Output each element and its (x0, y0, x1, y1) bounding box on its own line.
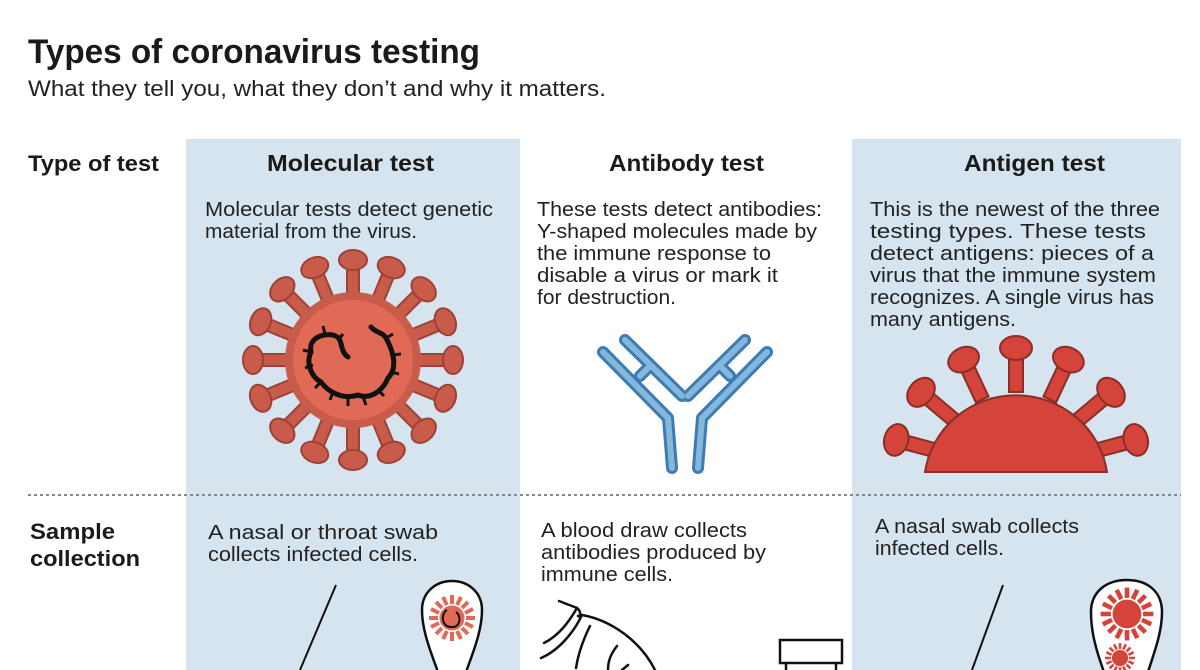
text: molecular description: material from the virus. (205, 221, 417, 243)
text: antibody sample (541, 520, 766, 586)
row label: type of test: Type of test (28, 151, 160, 176)
text: molecular sample: collects infected cells. (208, 544, 418, 566)
row label: sample collection: Sample (30, 519, 115, 544)
text: antigen sample (875, 516, 1079, 560)
panel: molecular column background (186, 139, 520, 670)
text: antigen description: recognizes. A single virus has (870, 287, 1154, 309)
text: antibody sample: antibodies produced by (541, 542, 766, 564)
text: antigen description: virus that the immune system (870, 265, 1156, 287)
text: molecular sample (208, 522, 438, 566)
title: Types of coronavirus testing (28, 33, 480, 71)
text: molecular description: Molecular tests detect genetic (205, 199, 493, 221)
icon: molecular swab (300, 581, 482, 670)
icon: blood draw arm and vial (541, 601, 842, 670)
text: molecular description (205, 199, 493, 243)
text: antibody sample: immune cells. (541, 564, 673, 586)
icon: antibody (Y-shaped) (603, 340, 767, 468)
text: antibody description: disable a virus or mark it (537, 265, 778, 287)
text: antigen sample: A nasal swab collects (875, 516, 1079, 538)
text: antibody description: These tests detect antibodies: (537, 199, 822, 221)
text: antibody description: for destruction. (537, 287, 676, 309)
heading: molecular test: Molecular test (267, 150, 434, 176)
text: antigen description (870, 199, 1160, 331)
text: antigen description: This is the newest of the three (870, 199, 1160, 221)
text: antibody sample: A blood draw collects (541, 520, 747, 542)
text: antibody description (537, 199, 822, 309)
heading: antibody test: Antibody test (609, 150, 764, 176)
dashed divider (28, 494, 1181, 496)
text: antigen description: many antigens. (870, 309, 1016, 331)
subtitle: What they tell you, what they don’t and why it matters. (28, 76, 606, 101)
row label: sample collection (30, 519, 140, 571)
text: antibody description: Y-shaped molecules made by (537, 221, 817, 243)
icon: coronavirus with genetic material (243, 250, 463, 470)
text: molecular sample: A nasal or throat swab (208, 522, 438, 544)
panel: antigen column background (852, 139, 1181, 670)
text: antigen description: detect antigens: pieces of a (870, 243, 1155, 265)
icon: antigen half virus (880, 336, 1152, 472)
text: antigen sample: infected cells. (875, 538, 1004, 560)
text: antibody description: the immune response to (537, 243, 771, 265)
text: antigen description: testing types. These tests (870, 221, 1146, 243)
icon: antigen swab (972, 580, 1162, 670)
heading: antigen test: Antigen test (964, 150, 1105, 176)
row label: sample collection: collection (30, 546, 140, 571)
